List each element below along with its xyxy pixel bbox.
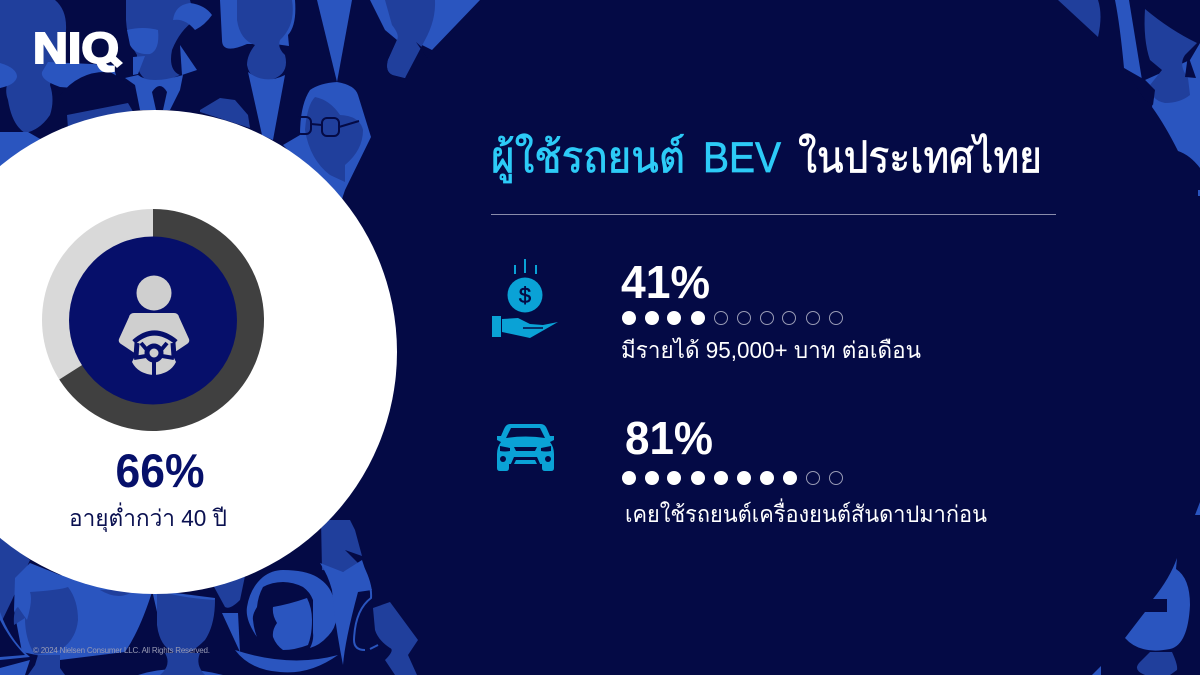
stat block: income xyxy=(492,256,921,363)
label: used ICE car before: เคยใช้รถยนต์เครื่องยนต์สันดาปมาก่อน xyxy=(625,498,987,527)
background silhouettes: top right xyxy=(1058,0,1200,196)
stat: 66 percent: 66% xyxy=(116,444,204,497)
dots: 8 of 10 xyxy=(622,471,842,485)
title xyxy=(491,133,1042,184)
icon: hand with coin xyxy=(492,259,558,338)
icon: hand with coin: $ xyxy=(519,283,531,308)
stat block: previous ICE use xyxy=(497,412,987,527)
dots: 4 of 10 xyxy=(622,311,842,325)
icon: car xyxy=(497,424,554,471)
label: under 40 years: อายุต่ำกว่า 40 ปี xyxy=(69,502,227,532)
copyright: © 2024 Nielsen Consumer LLC. All Rights Reserved. xyxy=(33,646,210,655)
icon: driver at steering wheel xyxy=(119,276,189,376)
background silhouettes: bottom right xyxy=(1092,502,1200,675)
stat: 81 percent: 81% xyxy=(625,412,713,464)
donut chart: 66 percent xyxy=(42,209,264,431)
title: ผู้ใช้รถยนต์ xyxy=(491,133,685,184)
title: ในประเทศไทย xyxy=(798,133,1042,182)
label: income: มีรายได้ 95,000+ บาท ต่อเดือน xyxy=(621,337,921,363)
divider xyxy=(491,214,1056,215)
background silhouettes: bottom left xyxy=(0,520,418,675)
stat: 41 percent: 41% xyxy=(621,256,710,308)
white circle panel xyxy=(0,110,397,594)
title: BEV xyxy=(703,134,781,182)
logo: NIQ: NIQ xyxy=(33,24,119,73)
background silhouettes: top left xyxy=(0,0,480,205)
